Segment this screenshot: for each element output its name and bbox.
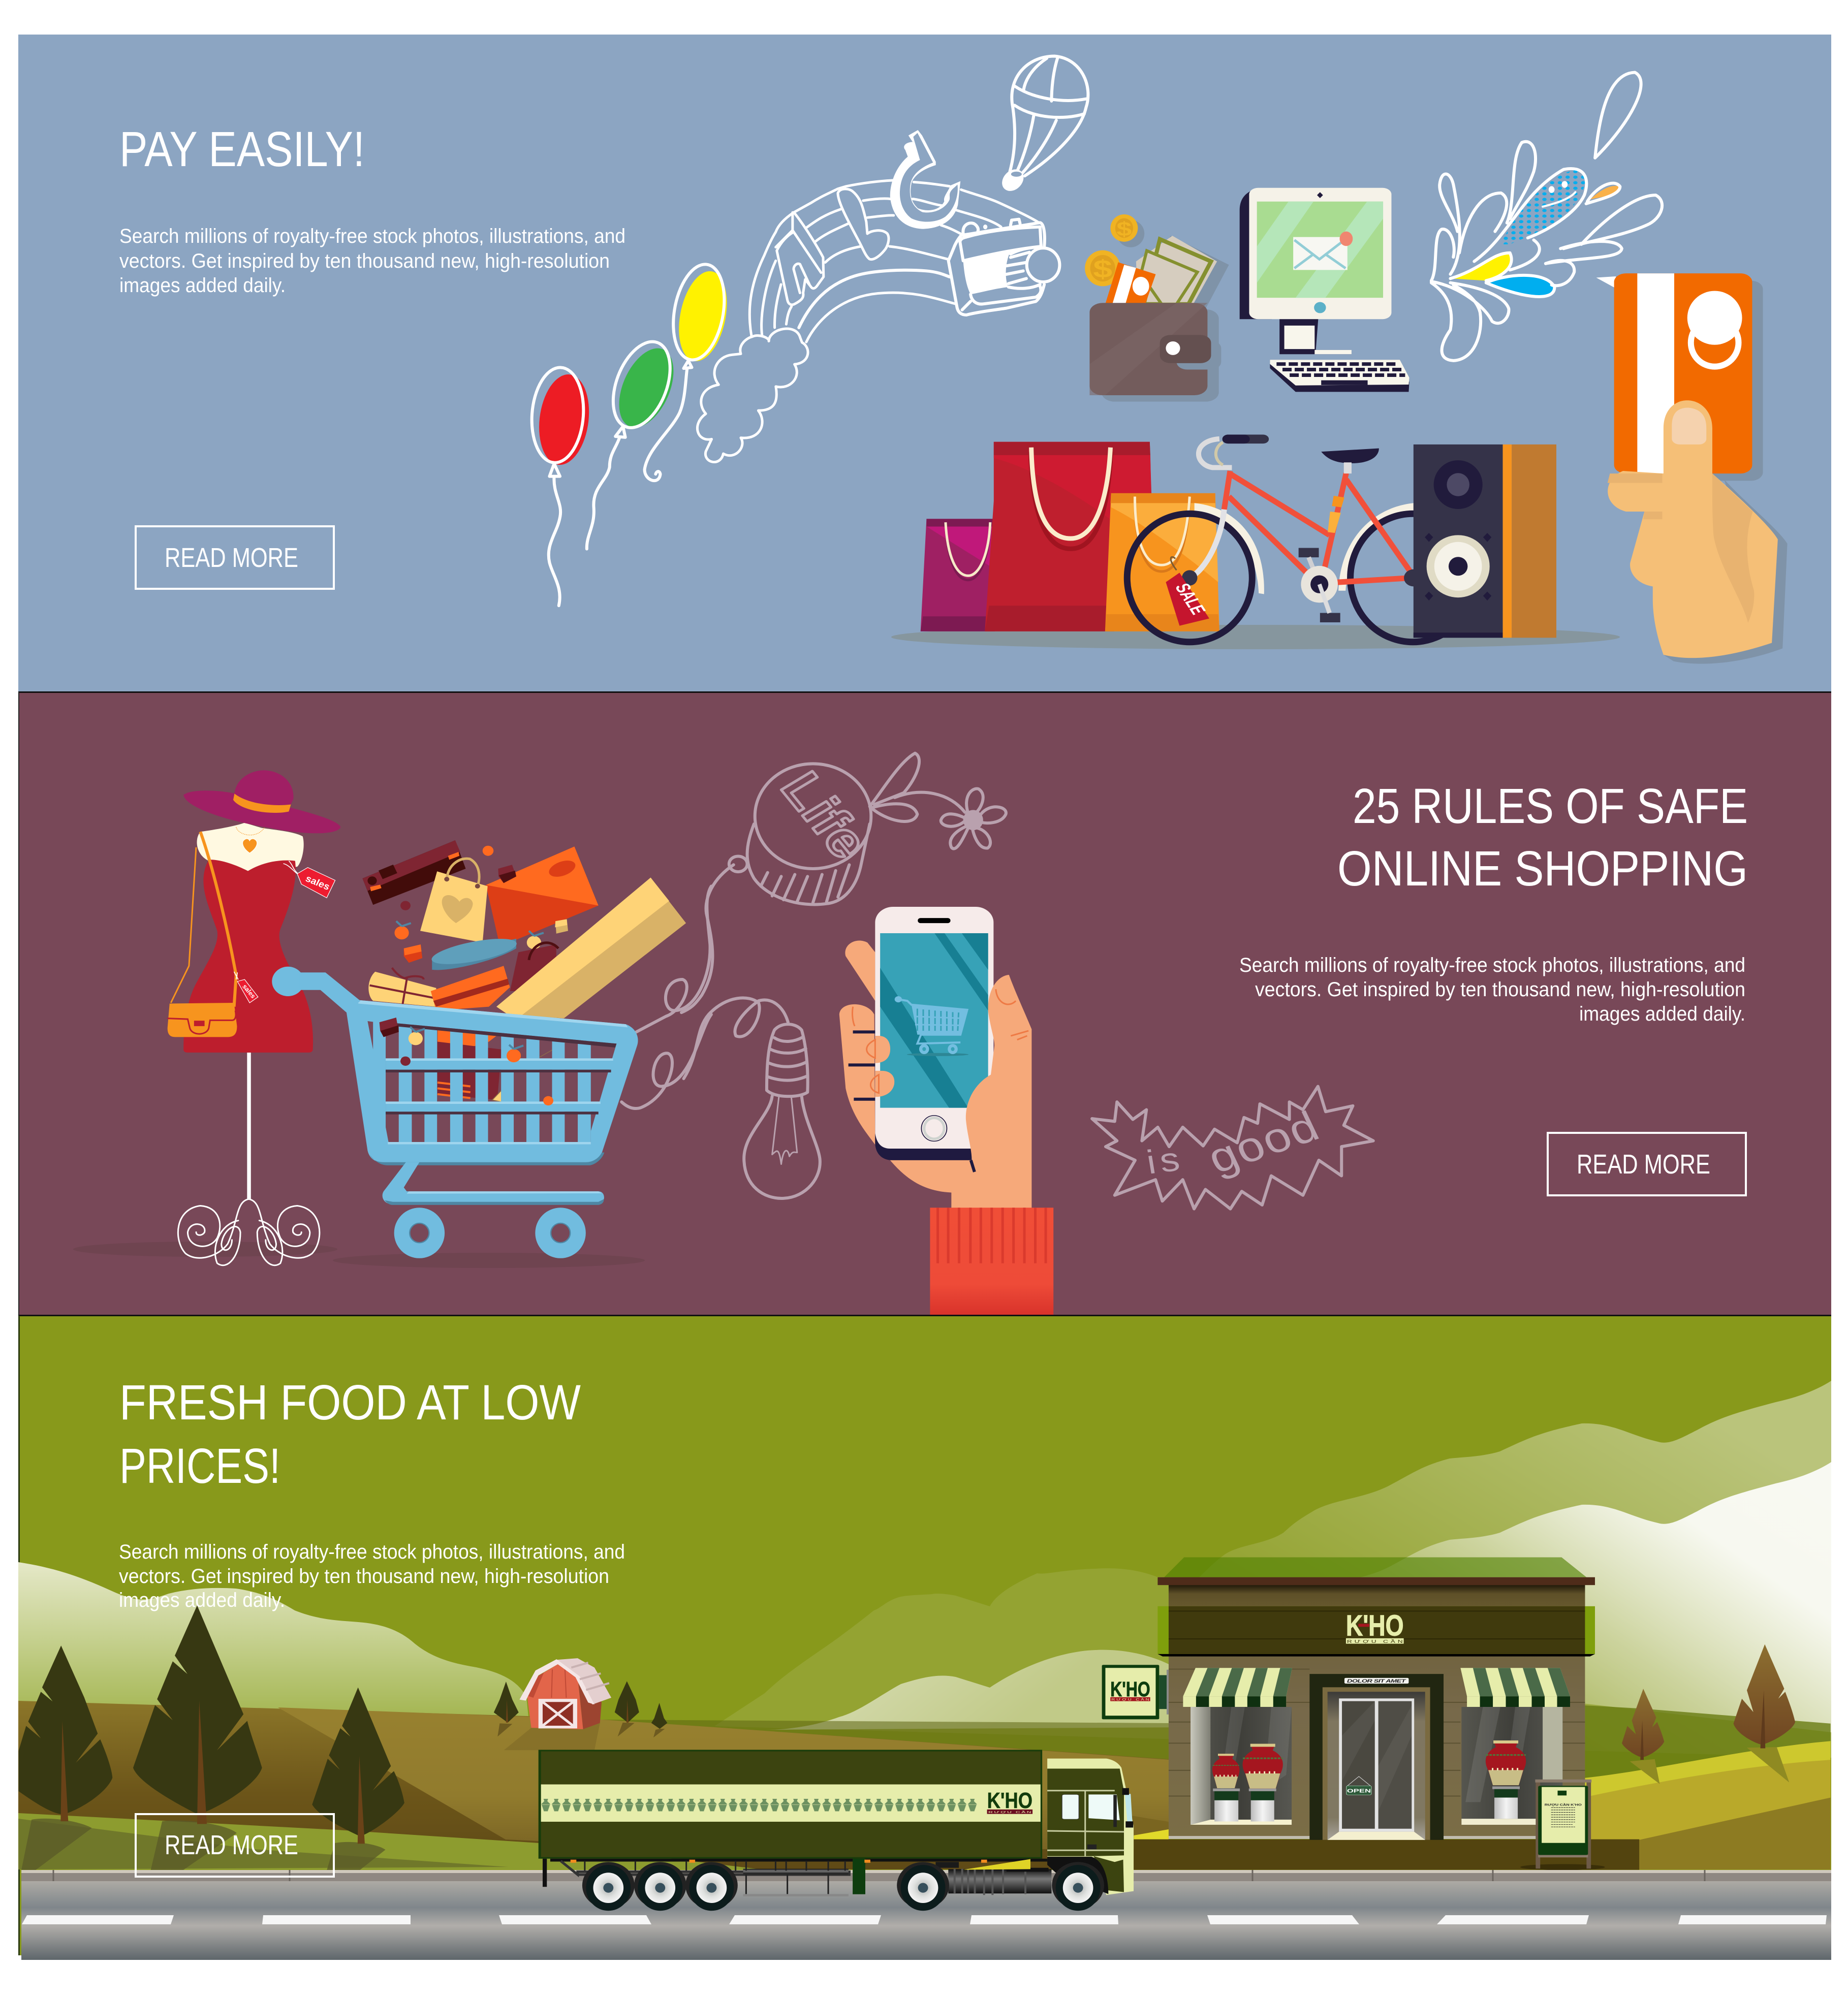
sign: open: OPEN [1347,1788,1371,1794]
button: read more [1548,1133,1746,1195]
wheel [582,1862,635,1911]
icon: bicycle [1127,435,1476,642]
truck [539,1750,1134,1911]
price tags: sales [241,983,258,1000]
title: 25 rules of safe online shopping: 25 RULES OF SAFE [1353,778,1748,834]
tag: sale [1166,557,1209,626]
title: fresh food [119,1375,581,1494]
bag: red [985,442,1151,631]
hanging sign: RƯỢU CẦN [1111,1698,1149,1701]
road [21,1870,1831,1960]
doodle: horseshoe [890,130,960,229]
icon: wallet with cash: $ [1116,218,1132,240]
trees: left group [18,1605,404,1872]
panel: pay easily [18,35,1831,692]
vase [1212,1754,1239,1788]
title: 25 rules of safe online shopping: ONLINE SHOPPING [1337,841,1748,896]
icon: mini cart on screen [895,996,968,1056]
doodle: cords [621,886,711,1108]
goods flying from cart [362,840,686,1102]
body text: pay easily: images added daily. [119,274,286,297]
truck logo: RƯỢU CẦN [988,1811,1031,1814]
doodle: rainbow bands [749,180,1039,342]
icon: hand holding credit card [1596,273,1788,664]
wheel [897,1862,949,1911]
ground shadow [891,625,1620,649]
wheel [1052,1862,1104,1911]
doodle: is good starburst [1092,1087,1373,1209]
wheel [685,1862,738,1911]
left awning [1183,1668,1292,1707]
button: read more [136,526,334,589]
icon: mannequin with dress [168,770,340,1265]
panel: fresh food [18,1315,1831,1960]
brown tree large [1734,1644,1795,1748]
green roof [1164,1557,1586,1577]
button: read more: READ MORE [1577,1149,1710,1180]
shop building: K'HO [1346,1610,1404,1642]
doodle: cloud [697,329,808,462]
button: read more [136,1814,334,1877]
price tags: sales [304,874,331,893]
body text: pay easily: Search millions of royalty-free stock photos, illustrations, and [119,225,625,247]
icon: desktop computer [1240,188,1410,392]
shop building [1102,1557,1605,1870]
truck cab [1047,1759,1134,1895]
doodle: is good starburst: good [1201,1103,1326,1183]
landscape fields [18,1701,1174,1869]
barn and small trees [494,1658,667,1750]
truck: K'HO [987,1788,1032,1813]
icon: wallet with cash: $ [1093,255,1112,283]
information stand [1520,1780,1605,1870]
sleeve cuff [930,1208,1053,1317]
doodle: light bulb [684,998,820,1198]
chassis [543,1859,1065,1896]
cart wheels [394,1208,586,1258]
body text: fresh food: Search millions of royalty-free stock photos, illustrations, and [119,1541,625,1563]
ground shadows [73,1242,645,1268]
body text: pay easily: vectors. Get inspired by ten thousand new, high-resolution [119,250,610,272]
doodle: hot air balloon [998,56,1088,193]
vase [1243,1744,1283,1789]
tree 3 [312,1688,404,1844]
title: fresh food: PRICES! [119,1438,280,1494]
icon: hand holding phone [839,907,1053,1317]
barn [519,1658,611,1729]
vase [1486,1740,1526,1785]
hat [183,770,340,833]
road lane dashes [22,1915,1827,1924]
brown tree small [1622,1689,1664,1760]
body text: safe shopping [1239,954,1745,1025]
icon: shopping cart with goods [272,840,686,1258]
tag: sale: SALE [1171,581,1209,617]
icon: balloons [529,262,734,606]
body text: pay easily [119,225,625,297]
doodle: camera [949,219,1059,315]
doodle: rainbow with letters, horseshoe and camera [749,130,1059,342]
doodle: is good starburst: is [1144,1140,1182,1181]
sign: open [1346,1777,1371,1795]
bag: purple [921,519,995,631]
hanging sign [1102,1665,1169,1719]
mannequin base swirl [178,1199,320,1265]
right window [1461,1707,1562,1825]
icon: shopping bags [921,442,1219,631]
bag: orange [1105,493,1219,631]
body text: safe shopping: Search millions of royalty-free stock photos, illustrations, and [1239,954,1745,976]
truck wheels [582,1862,1104,1911]
cart basket [272,967,638,1205]
shop door [1309,1674,1444,1840]
shop logo [1346,1610,1404,1644]
panel: safe online shopping [18,691,1831,1317]
orange handbag [168,1003,237,1037]
trailer box [539,1750,1042,1859]
information stand: RƯỢU CẦN K'HO [1545,1803,1582,1806]
title: pay easily: PAY EASILY! [119,121,365,177]
right side fields and trees [1067,1644,1831,1870]
sign: dolor sit amet: DOLOR SIT AMET [1347,1678,1406,1684]
brown hillside left of shop [1067,1805,1169,1842]
icon: wallet with cash [1085,214,1229,402]
doodle: life lollipop and flower [681,753,1006,1012]
background hills [18,1381,1831,1758]
price tags [234,861,335,1003]
plinth [1134,1840,1639,1870]
shop logo: RƯỢU CẦN [1347,1639,1403,1644]
truck logo [987,1788,1032,1814]
button: read more: READ MORE [165,543,298,573]
tree 1 [18,1645,112,1821]
body text: safe shopping: vectors. Get inspired by ten thousand new, high-resolution [1255,978,1745,1001]
tree 2 [133,1605,262,1824]
body text: fresh food: vectors. Get inspired by ten thousand new, high-resolution [119,1565,609,1588]
right awning [1460,1668,1570,1707]
button: read more: READ MORE [165,1830,298,1860]
doodle: splash flower [1431,72,1662,361]
left window [1191,1707,1292,1825]
body text: safe shopping: images added daily. [1579,1003,1745,1025]
icon: speaker [1414,445,1556,638]
body text: fresh food [119,1541,625,1611]
hanging sign: K'HO [1110,1677,1150,1701]
title: 25 rules of safe online shopping [1337,778,1748,896]
doodle: life lollipop and flower: Life [769,763,881,868]
wheel [634,1862,686,1911]
title: fresh food: FRESH FOOD AT LOW [119,1375,581,1430]
body text: fresh food: images added daily. [119,1589,285,1611]
